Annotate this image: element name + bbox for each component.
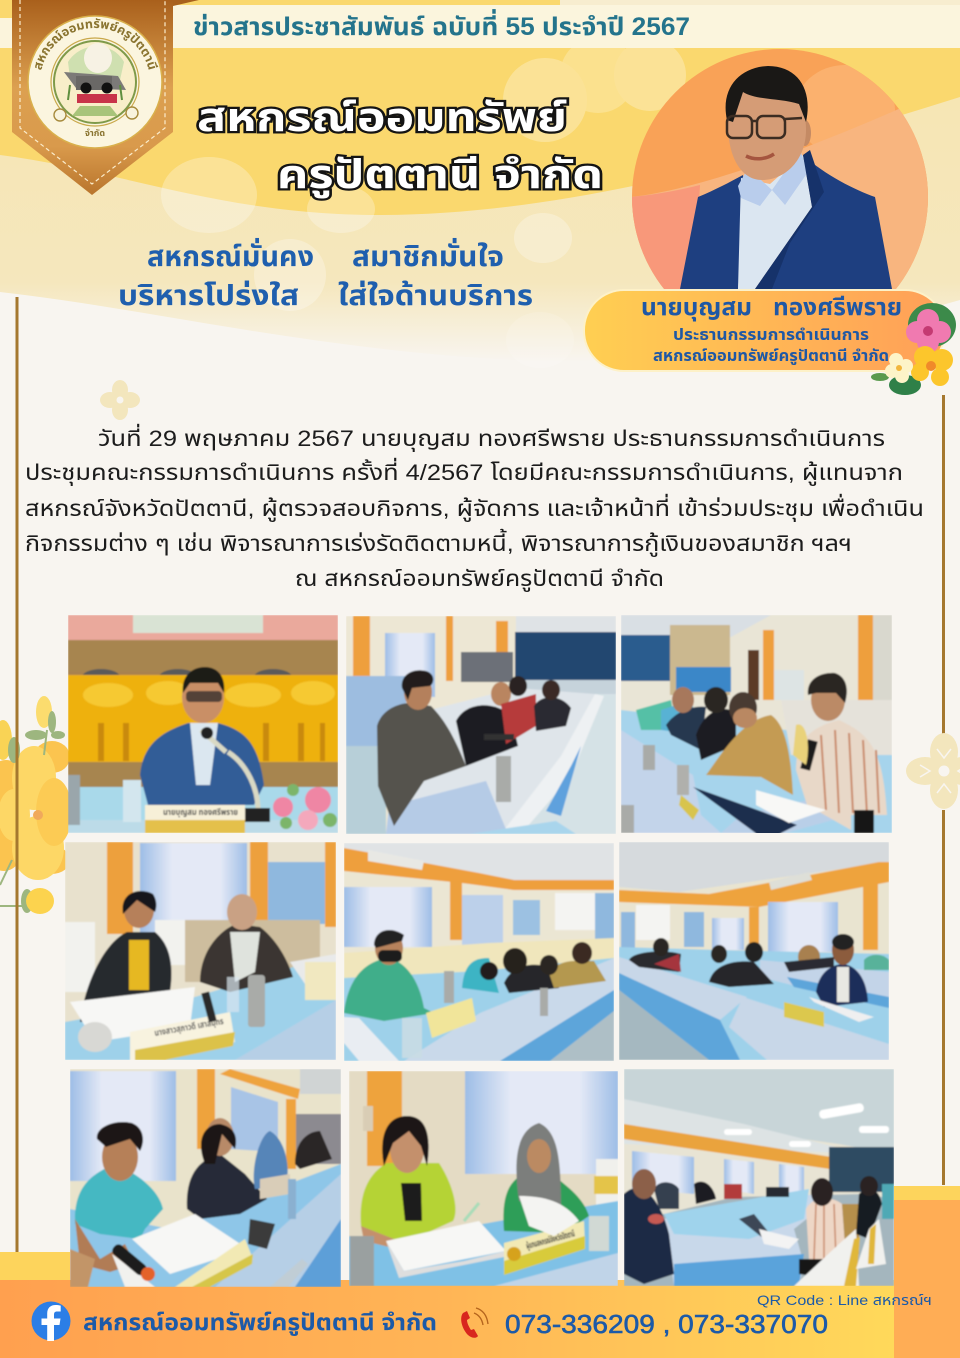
- slogan: บริหารโปร่งใส: [118, 280, 299, 311]
- photo: participant in green with mask: [344, 843, 614, 1061]
- footer organisation name: สหกรณ์ออมทรัพย์ครูปัตตานี จำกัด: [83, 1309, 437, 1336]
- chairman name: ทองศรีพราย: [773, 294, 902, 321]
- body text: สหกรณ์จังหวัดปัตตานี, ผู้ตรวจสอบกิจการ, ผู้จัดการ และเจ้าหน้าที่ เข้าร่วมประชุม เพื่อดำเนิน: [25, 493, 924, 522]
- body text: วันที่ 29 พฤษภาคม 2567 นายบุญสม ทองศรีพราย ประธานกรรมการดำเนินการ: [98, 423, 885, 452]
- photo: chairman at the head table: [68, 615, 338, 833]
- chairman name: นายบุญสม: [641, 294, 752, 322]
- floral decoration: left: [0, 696, 72, 914]
- body text: ณ สหกรณ์ออมทรัพย์ครูปัตตานี จำกัด: [295, 566, 664, 592]
- phone numbers: 073-336209 , 073-337070: [505, 1309, 828, 1339]
- photo: wide view with ceiling lights: [624, 1069, 894, 1286]
- body text: กิจกรรมต่าง ๆ เช่น พิจารณาการเร่งรัดติดตามหนี้, พิจารณาการกู้เงินของสมาชิก ฯลฯ: [25, 528, 852, 557]
- photo: two women with open book: [349, 1071, 618, 1286]
- footer bar: [0, 1280, 932, 1358]
- chairman name: [641, 294, 902, 322]
- icon: facebook: [32, 1302, 70, 1341]
- QR code caption: QR Code : Line สหกรณ์ฯ: [757, 1292, 932, 1308]
- logo seal: [27, 15, 163, 149]
- header background waves: [0, 0, 960, 368]
- main title: [197, 96, 603, 199]
- decorative gold side rules: [16, 297, 945, 1272]
- logo seal: จำกัด: [85, 128, 105, 138]
- main title: ครูปัตตานี จำกัด: [277, 153, 603, 199]
- slogan: ใส่ใจด้านบริการ: [338, 280, 533, 311]
- ribbon badge with logo: [12, 0, 199, 195]
- slogan: สหกรณ์มั่นคง: [147, 237, 314, 272]
- photo: wide view of meeting tables: [619, 842, 889, 1060]
- body text: ประชุมคณะกรรมการดำเนินการ ครั้งที่ 4/2567 โดยมีคณะกรรมการดำเนินการ, ผู้แทนจาก: [25, 457, 903, 486]
- organisation: สหกรณ์ออมทรัพย์ครูปัตตานี จำกัด: [653, 348, 889, 366]
- photo: woman and man at the table: นางสาวสุภาวดี เสาสมุทร: [154, 1016, 225, 1038]
- ornament: top knot: [100, 380, 140, 420]
- slogan: [118, 237, 533, 311]
- bottom edge bands: [0, 1186, 960, 1358]
- ornament: right knot: [906, 733, 960, 809]
- flower bouquet: [871, 303, 956, 395]
- icon: telephone: [461, 1308, 488, 1338]
- photo: meeting room, man in grey jacket: [346, 616, 616, 834]
- main title: สหกรณ์ออมทรัพย์: [197, 96, 567, 140]
- name plate: [584, 290, 956, 395]
- newsletter strip: [0, 5, 960, 48]
- chairman position: ประธานกรรมการดำเนินการ: [673, 327, 869, 344]
- photo: speaker with microphone and laptop: [621, 615, 892, 833]
- slogan: สมาชิกมั่นใจ: [352, 237, 504, 272]
- portrait of chairman: [632, 49, 928, 289]
- newsletter strip: ข่าวสารประชาสัมพันธ์ ฉบับที่ 55 ประจำปี 2567: [193, 9, 690, 41]
- logo seal: สหกรณ์ออมทรัพย์ครูปัตตานี: [35, 18, 158, 70]
- body text: [25, 423, 924, 592]
- photo: woman and man at the table: [65, 842, 336, 1060]
- photo: chairman at the head table: นายบุญสม ทองศรีพราย: [163, 807, 238, 817]
- photo: young man in teal shirt: [70, 1069, 341, 1287]
